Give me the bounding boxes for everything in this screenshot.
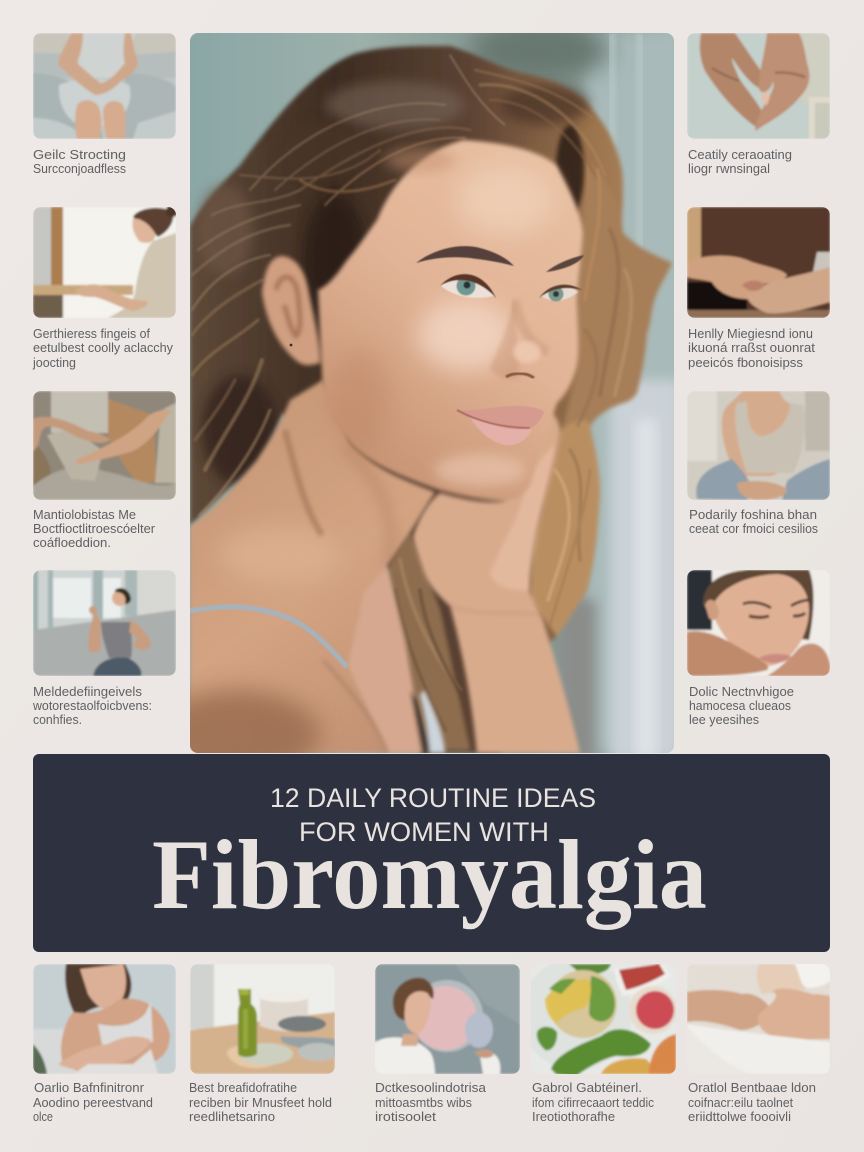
card: hand care bbox=[33, 964, 176, 1124]
caption: Dolic Nectnvhigoe bbox=[689, 685, 794, 699]
caption: Ireotiothorafhe bbox=[532, 1110, 615, 1124]
main title: Fibromyalgia: Fibromyalgia bbox=[152, 819, 707, 930]
caption: ceeat cor fmoici cesilios bbox=[689, 522, 818, 536]
photo: woman on studio floor bbox=[33, 570, 176, 676]
photo: woman with blanket bbox=[687, 391, 830, 500]
hero portrait photo bbox=[190, 33, 674, 753]
caption bbox=[375, 1081, 486, 1124]
caption: eriidttolwe foooivli bbox=[688, 1110, 791, 1124]
caption: Boctfioctlitroescóelter bbox=[33, 522, 155, 536]
caption: Geilc Strocting bbox=[33, 148, 126, 162]
caption: hamocesa clueaos bbox=[689, 699, 791, 713]
caption bbox=[689, 685, 794, 727]
caption: coifnacr:eilu taolnet bbox=[688, 1096, 794, 1110]
caption: Henlly Miegiesnd ionu bbox=[688, 327, 813, 341]
caption: joocting bbox=[32, 356, 76, 370]
caption: wotorestaolfoicbvens: bbox=[32, 699, 152, 713]
caption: Ceatily ceraoating bbox=[688, 148, 792, 162]
card: healthy food plate bbox=[531, 964, 676, 1121]
caption: liogr rwnsingal bbox=[688, 162, 770, 176]
photo: woman with textured pink cushion bbox=[375, 964, 520, 1074]
caption: Dctkesoolindotrisa bbox=[375, 1081, 486, 1095]
caption: reedlihetsarino bbox=[189, 1110, 275, 1124]
photo: hands forming a heart bbox=[687, 33, 830, 139]
caption bbox=[532, 1081, 654, 1124]
photo: woman's face resting on hands bbox=[687, 570, 830, 676]
photo: hands resting on towel bbox=[687, 960, 833, 1074]
caption: coáfloeddion. bbox=[33, 536, 111, 550]
card: arms on sofa pillows bbox=[33, 391, 176, 550]
caption: Gerthieress fingeis of bbox=[33, 327, 151, 341]
caption bbox=[33, 1081, 153, 1124]
caption: olce bbox=[33, 1110, 53, 1124]
card: tank top and blanket bbox=[687, 391, 830, 536]
photo: arms resting on pillows bbox=[33, 391, 176, 500]
caption bbox=[688, 148, 792, 176]
caption: Best breafidofratihe bbox=[189, 1081, 297, 1095]
card: hands on white towel bbox=[687, 960, 833, 1124]
caption bbox=[33, 148, 126, 176]
caption: reciben bir Mnusfeet hold bbox=[189, 1096, 332, 1110]
caption bbox=[189, 1081, 332, 1124]
caption: Aoodino pereestvand bbox=[33, 1096, 153, 1110]
caption: ifom cifirrecaaort teddic bbox=[532, 1096, 654, 1110]
card: oil bottle on table bbox=[189, 964, 338, 1124]
camisole strap bbox=[190, 607, 347, 667]
title banner bbox=[33, 754, 830, 952]
caption: irotisoolet bbox=[375, 1110, 437, 1124]
photo: woman seated on grey cushions bbox=[33, 33, 176, 139]
caption: conhfies. bbox=[33, 713, 82, 727]
card: stretching on cushions bbox=[33, 33, 176, 176]
caption: Gabrol Gabtéinerl. bbox=[532, 1081, 642, 1095]
card: woman with pink pad bbox=[375, 964, 520, 1124]
caption bbox=[33, 508, 155, 550]
caption: mittoasmtbs wibs bbox=[375, 1096, 472, 1110]
photo: plate with grains, greens and fruit bbox=[531, 964, 676, 1074]
caption: eetulbest coolly aclacchy bbox=[33, 341, 174, 355]
card: face held in hands bbox=[687, 570, 830, 727]
caption: Podarily foshina bhan bbox=[689, 508, 817, 522]
photo: hands clasped on lap bbox=[687, 207, 830, 318]
caption bbox=[32, 685, 152, 727]
caption: peeicós fbonoisipss bbox=[688, 356, 803, 370]
caption: lee yeesihes bbox=[689, 713, 759, 727]
caption: Oarlio Bafnfinitronr bbox=[34, 1081, 144, 1095]
hair strands bbox=[192, 55, 631, 730]
card: seated at table by window bbox=[32, 205, 178, 370]
title line: for women with: FOR WOMEN WITH bbox=[299, 817, 549, 847]
photo: woman massaging hands bbox=[33, 964, 176, 1074]
caption bbox=[689, 508, 818, 536]
caption bbox=[688, 1081, 816, 1124]
caption bbox=[688, 327, 816, 370]
photo: green oil bottle and stones bbox=[190, 964, 338, 1074]
caption: ikuoná rraßst ouonrat bbox=[688, 341, 816, 355]
caption: Mantiolobistas Me bbox=[33, 508, 136, 522]
facial features bbox=[416, 246, 584, 302]
card: heart-shaped hands bbox=[687, 33, 830, 176]
card: clasped hands bbox=[687, 207, 830, 370]
caption: Oratlol Bentbaae ldon bbox=[688, 1081, 816, 1095]
caption: Surcconjoadfless bbox=[33, 162, 126, 176]
photo: woman at window table bbox=[33, 205, 178, 318]
title line: 12 daily routine ideas: 12 DAILY ROUTINE IDEAS bbox=[270, 783, 596, 813]
caption: Meldedefiingeivels bbox=[33, 685, 142, 699]
card: floor stretching bbox=[32, 570, 176, 727]
caption bbox=[32, 327, 174, 370]
